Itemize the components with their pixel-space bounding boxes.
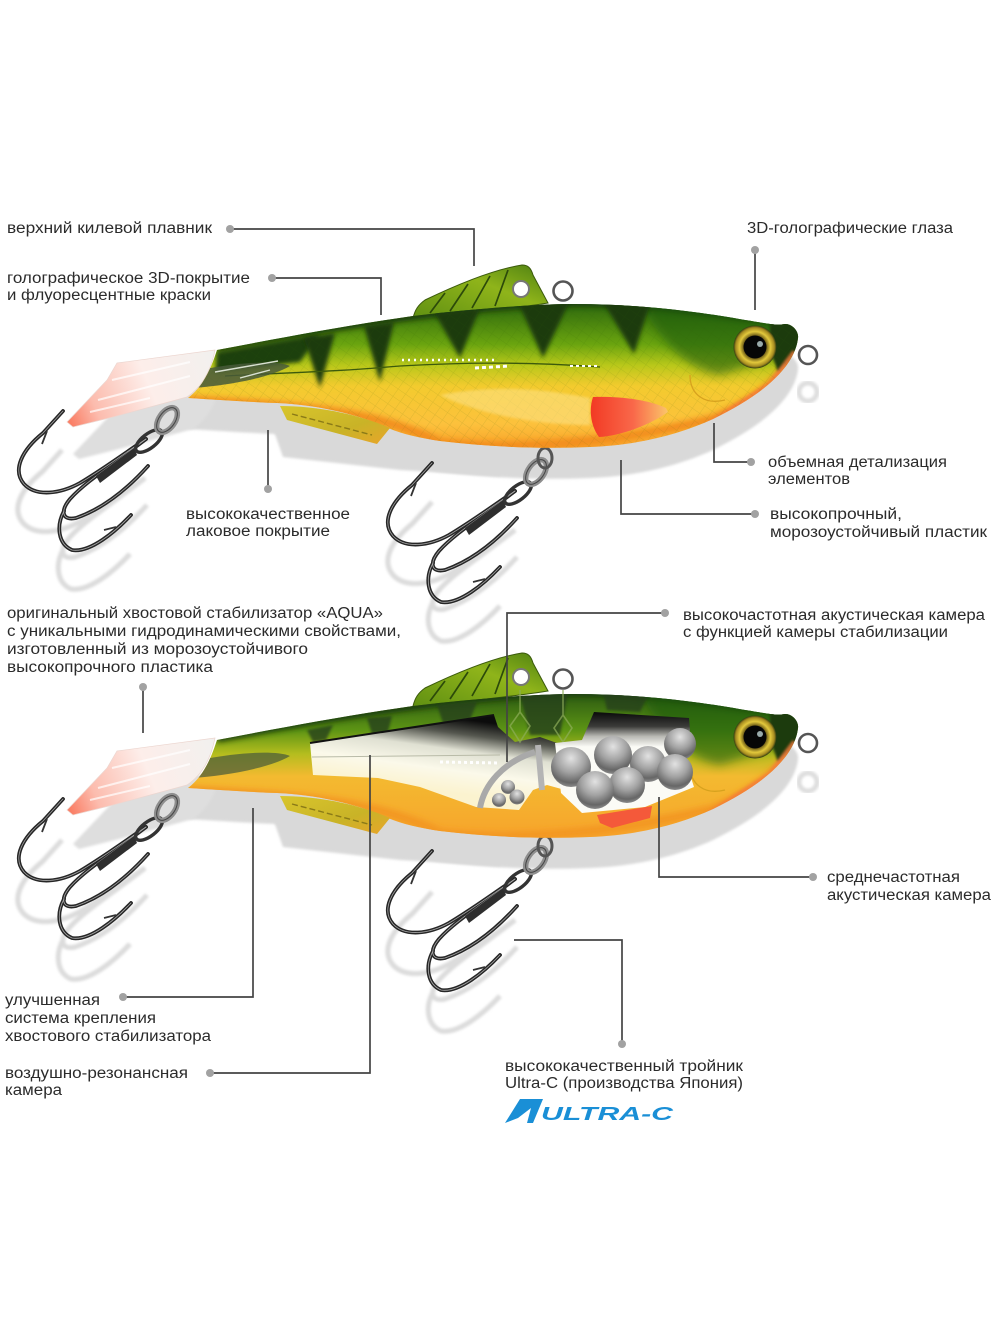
label: tail mount	[5, 992, 211, 1045]
leader: tail stabilizer	[139, 683, 147, 733]
tail and dorsal fin of lower lure	[67, 653, 817, 815]
leader: treble hook	[514, 940, 626, 1048]
leader: lacquer coating	[264, 430, 272, 493]
label: tail mount: система крепления	[5, 1010, 156, 1027]
label: volumetric detail: объемная детализация	[768, 454, 947, 471]
leader: frost resistant plastic	[621, 460, 759, 518]
upper fish lure illustration	[18, 265, 817, 641]
label: high-frequency chamber: высокочастотная акустическая камера	[683, 607, 985, 624]
label: tail stabilizer: изготовленный из морозоустойчивого	[7, 641, 308, 658]
label: high-frequency chamber: с функцией камеры стабилизации	[683, 624, 948, 641]
logo: Ultra-C	[505, 1099, 675, 1124]
label: lacquer coating: лаковое покрытие	[186, 523, 330, 540]
label: mid-frequency chamber: акустическая камера	[827, 887, 991, 904]
label: tail mount: улучшенная	[5, 992, 100, 1009]
label: frost resistant plastic: морозоустойчивый пластик	[770, 524, 987, 541]
label: air resonance chamber: воздушно-резонансная	[5, 1065, 188, 1082]
lower lure body	[185, 690, 800, 838]
label: treble hook: высококачественный тройник	[505, 1058, 743, 1075]
pectoral red fin	[591, 397, 668, 437]
high-frequency chamber septum and small balls	[480, 745, 542, 808]
label: tail stabilizer: с уникальными гидродинамическими свойствами,	[7, 623, 401, 640]
hooks of lower lure	[19, 792, 552, 990]
label: mid-frequency chamber	[827, 869, 991, 904]
label: holographic coating	[7, 270, 250, 304]
shadow of lower lure	[18, 725, 817, 1031]
label: frost resistant plastic	[770, 506, 987, 541]
label: tail stabilizer: оригинальный хвостовой стабилизатор «AQUA»	[7, 605, 383, 622]
red fin strip on lower lure	[597, 806, 652, 828]
mid-frequency chamber with steel balls	[551, 712, 696, 813]
leader: tail mount	[119, 808, 253, 1001]
keel stabilizer of upper lure	[280, 406, 390, 444]
label: holographic coating: голографическое 3D-покрытие	[7, 270, 250, 287]
label: 3D eyes: 3D-голографические глаза	[747, 220, 953, 237]
label: lacquer coating	[186, 506, 350, 540]
label: mid-frequency chamber: среднечастотная	[827, 869, 960, 886]
lower fish lure cutaway illustration	[18, 653, 817, 1031]
label: air resonance chamber: камера	[5, 1082, 62, 1099]
eye	[734, 326, 776, 368]
leader: 3D eyes	[751, 246, 759, 310]
tail and dorsal fin of upper lure	[67, 265, 817, 427]
leader: high-frequency chamber	[507, 609, 669, 762]
leader: dorsal fin	[226, 225, 474, 266]
leader: volumetric detail	[714, 423, 755, 466]
hooks of upper lure	[19, 404, 552, 602]
eye of lower lure	[734, 716, 776, 758]
label: tail stabilizer	[7, 605, 401, 676]
label: volumetric detail: элементов	[768, 471, 850, 488]
label: volumetric detail	[768, 454, 947, 488]
label: frost resistant plastic: высокопрочный,	[770, 506, 902, 523]
cutaway window with air chamber	[310, 690, 572, 810]
leader: mid-frequency chamber	[659, 797, 817, 881]
shadow of upper lure	[18, 335, 817, 641]
label: treble hook: Ultra-C (производства Япония)	[505, 1075, 743, 1092]
keel stabilizer of lower lure	[280, 796, 390, 834]
wire frame in central hump	[510, 690, 572, 742]
logo: Ultra-C: ULTRA-C	[541, 1104, 675, 1124]
label: treble hook	[505, 1058, 743, 1092]
upper lure body	[185, 300, 800, 448]
label: tail mount: хвостового стабилизатора	[5, 1028, 211, 1045]
label: air resonance chamber	[5, 1065, 188, 1099]
label: holographic coating: и флуоресцентные краски	[7, 287, 211, 304]
label: lacquer coating: высококачественное	[186, 506, 350, 523]
leader: holographic coating	[268, 274, 381, 315]
label: dorsal fin: верхний килевой плавник	[7, 220, 212, 237]
label: high-frequency chamber	[683, 607, 985, 641]
leader: air resonance chamber	[206, 755, 370, 1077]
label: tail stabilizer: высокопрочного пластика	[7, 659, 213, 676]
